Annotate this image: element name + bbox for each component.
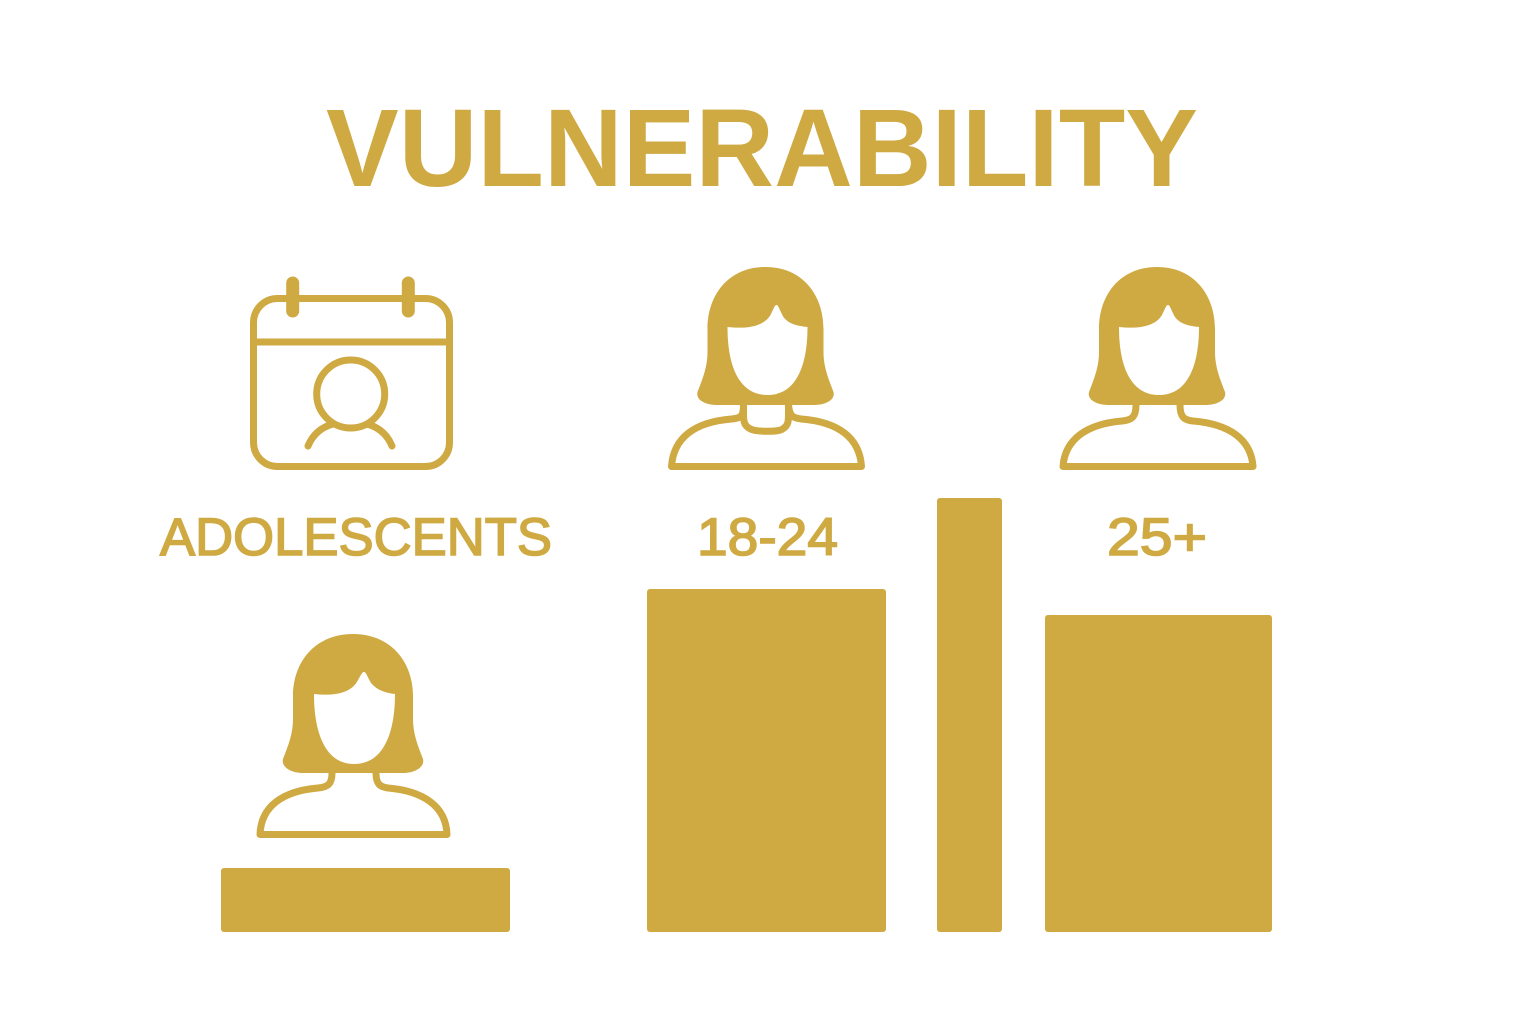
label: 18-24: 18-24 [697,508,838,567]
label: 25+: 25+ [1107,508,1207,567]
bar: adolescents [221,868,510,932]
bar: 18-24 left [647,589,886,932]
bar: 25+ [1045,615,1272,932]
bar: 18-24 right narrow [937,498,1002,932]
title: VULNERABILITY [326,87,1198,210]
icon: person 25+ [1063,267,1253,466]
icon: person 18-24 [672,267,862,466]
icon: calendar with person [254,283,450,466]
icon: person adolescents [260,634,447,834]
label: adolescents: ADOLESCENTS [160,508,552,567]
